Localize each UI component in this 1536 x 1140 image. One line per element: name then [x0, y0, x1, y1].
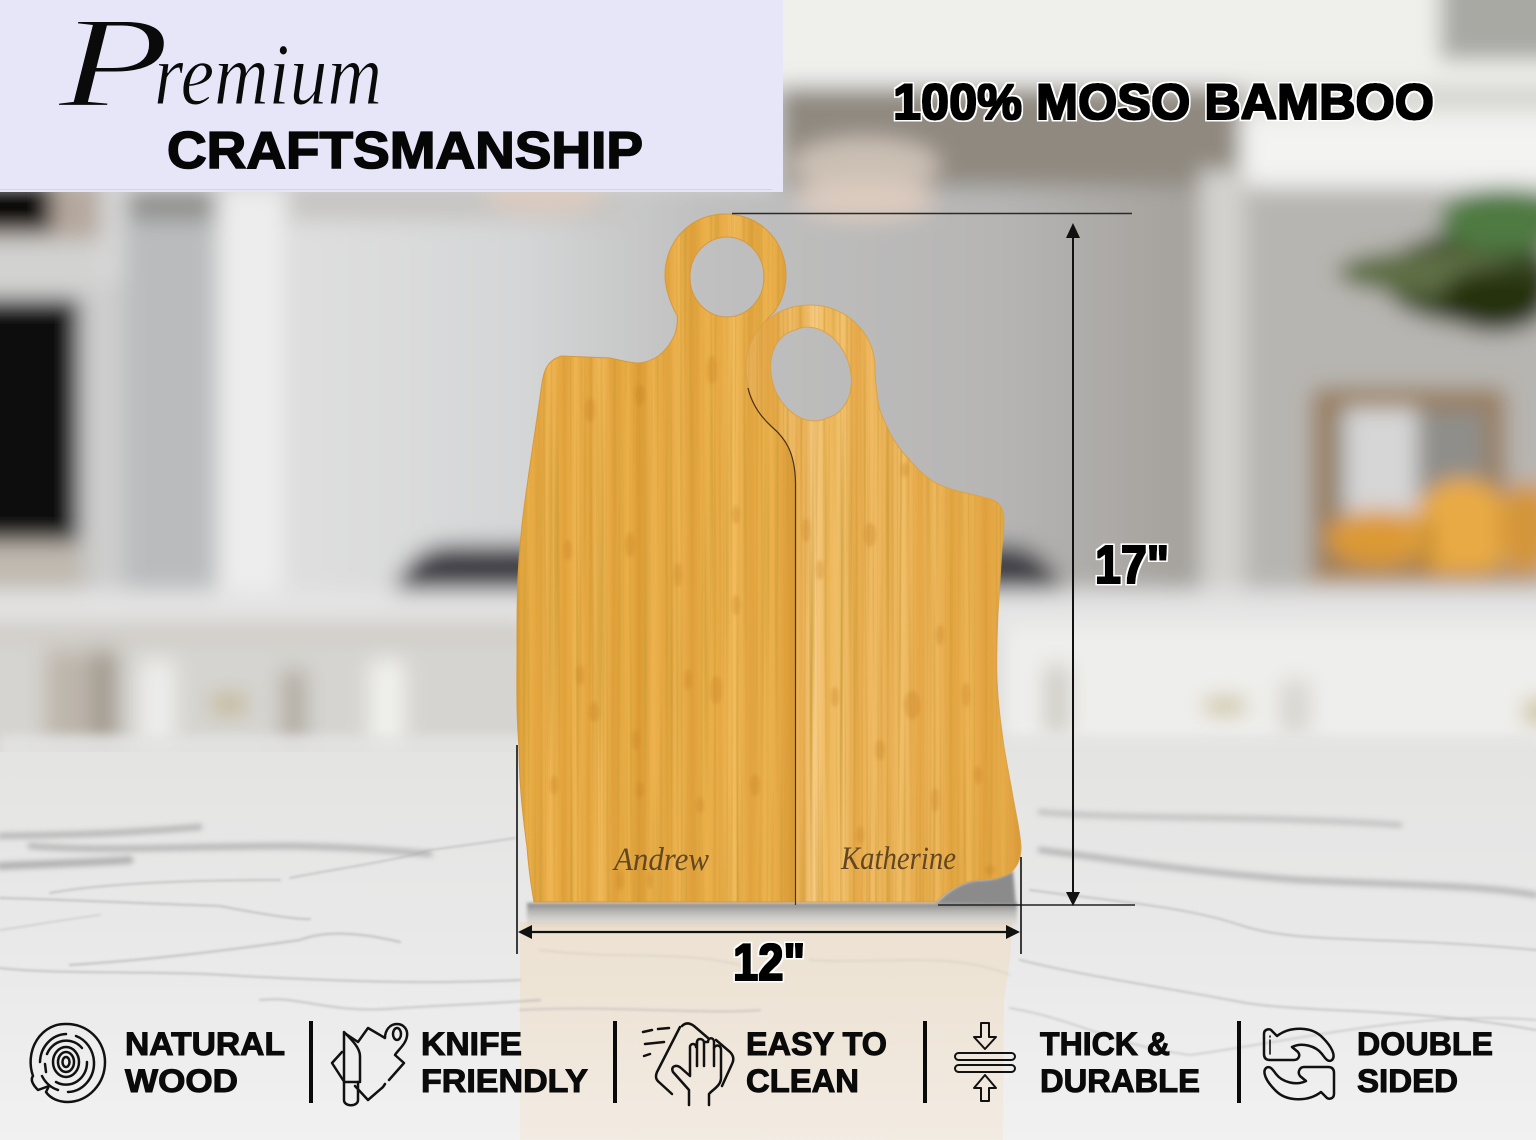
right cutting board [740, 300, 1030, 910]
feature text: double sided [1357, 1026, 1493, 1099]
gap between the boards [748, 388, 796, 905]
heading: 100% moso bamboo: 100% MOSO BAMBOO [893, 74, 1434, 130]
icon: wood rings [31, 1024, 105, 1102]
engraved name: Katherine: Katherine [840, 841, 956, 877]
feature text: easy to clean: CLEAN [746, 1063, 859, 1099]
marble countertop [0, 735, 1536, 1140]
feature text: double sided: DOUBLE [1357, 1026, 1493, 1062]
feature text: knife friendly [421, 1026, 588, 1099]
plant [1382, 232, 1536, 324]
board reflection on countertop [520, 922, 1012, 1140]
feature text: natural wood [125, 1026, 285, 1099]
wall [290, 186, 1205, 591]
counter and lower cabinets [0, 590, 1536, 628]
feature text: easy to clean: EASY TO [746, 1026, 887, 1062]
feature text: thick and durable [1040, 1026, 1200, 1099]
feature text: thick and durable: THICK & [1040, 1026, 1170, 1062]
engraved name: Andrew: Andrew [612, 842, 709, 878]
feature text: knife friendly: FRIENDLY [421, 1063, 588, 1099]
feature text: knife friendly: KNIFE [421, 1026, 522, 1062]
icon: thickness arrows and bars [955, 1023, 1015, 1101]
hob [395, 545, 1062, 590]
board shadow [527, 870, 1017, 929]
title: craftsmanship: CRAFTSMANSHIP [167, 122, 643, 180]
basket and oranges [1312, 388, 1506, 580]
left cutting board [510, 210, 800, 910]
feature text: natural wood: NATURAL [125, 1026, 285, 1062]
upper cabinets [0, 0, 1536, 85]
icon: hand wiping with a cloth [643, 1023, 733, 1105]
label: 17 inches: 17" [1095, 535, 1169, 595]
icon: knife and cutting board [332, 1024, 407, 1105]
height dimension arrow [732, 214, 1135, 906]
feature text: double sided: SIDED [1357, 1063, 1458, 1099]
feature text: thick and durable: DURABLE [1040, 1063, 1200, 1099]
width dimension arrow [517, 745, 1021, 954]
icon: double sided rotating arrows [1264, 1029, 1334, 1099]
title script: Premium: remium [154, 27, 382, 124]
title script: Premium [57, 0, 382, 135]
feature text: natural wood: WOOD [125, 1063, 238, 1099]
title panel [0, 0, 783, 192]
feature text: easy to clean [746, 1026, 887, 1099]
left side appliances and columns [0, 180, 100, 240]
label: 12 inches: 12" [733, 934, 805, 992]
